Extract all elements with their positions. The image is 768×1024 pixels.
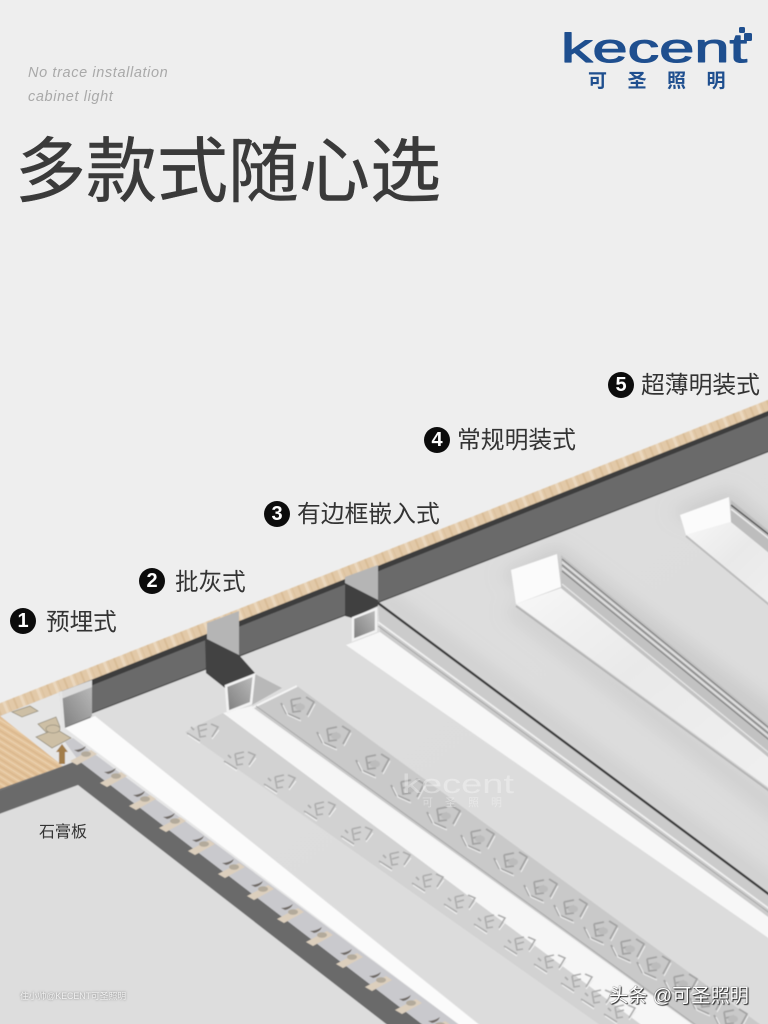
label 1: 预埋式 (46, 610, 117, 636)
logo chinese name: 可圣照明 (588, 66, 746, 93)
white diffuser (65, 716, 503, 1024)
lower ceiling board (0, 785, 412, 1024)
aluminium side (378, 604, 768, 933)
source watermark right: 头条 @可圣照明 (609, 986, 749, 1007)
label 2: 批灰式 (175, 570, 246, 596)
label 3: 有边框嵌入式 (297, 501, 440, 528)
logo wordmark: kecent (561, 25, 748, 71)
installation 2: plaster-in profile (185, 611, 768, 1024)
logo (561, 25, 752, 93)
right flange (252, 686, 768, 1024)
profile channel (59, 680, 92, 729)
label 4: 常规明装式 (457, 427, 576, 454)
gypsum board edge (0, 760, 448, 1024)
label 5: 超薄明装式 (641, 372, 760, 399)
soft shadows beside profiles (378, 488, 768, 911)
installation 1: embedded profile (0, 680, 504, 1024)
loose clips on plate (12, 706, 71, 748)
label 2: 2 (146, 570, 158, 592)
side stripes (731, 500, 768, 570)
source watermark left: 住小帅@KECENT可圣照明 (20, 991, 126, 1001)
label 1 (10, 608, 117, 636)
centre watermark: kecent (402, 769, 515, 799)
english subtitle: cabinet light (28, 89, 113, 105)
gypsum board label: 石膏板 (39, 824, 87, 841)
drawing group (0, 392, 768, 1024)
recessed plate (0, 692, 504, 1024)
channel box (353, 609, 376, 640)
right flange clips (281, 697, 748, 1024)
profile white centre (223, 706, 718, 1024)
wall notch (205, 611, 255, 688)
LED chips (70, 746, 451, 1024)
label 2 (139, 568, 246, 596)
left flange (185, 713, 667, 1024)
installation 3: framed embedded profile (345, 565, 768, 953)
wood block (0, 700, 63, 796)
centre watermark (402, 769, 515, 810)
side stripes (561, 555, 768, 775)
end cap (680, 497, 731, 535)
installation 5: ultra thin surface profile (680, 497, 768, 623)
arrow: installation direction (56, 744, 68, 764)
channel box (226, 674, 282, 712)
wall section (0, 402, 768, 798)
wall notch (345, 565, 378, 618)
label 4: 4 (431, 429, 443, 451)
white flange (346, 632, 768, 953)
installation 4: surface mounted profile (511, 554, 768, 806)
dark reveal line (378, 603, 768, 910)
diffuser (686, 522, 768, 623)
label 3: 3 (271, 503, 283, 525)
label 5: 5 (615, 374, 627, 396)
LED strip base (65, 738, 485, 1024)
centre watermark: 可圣照明 (422, 794, 514, 810)
ceiling plane (0, 412, 768, 1024)
logo dots (739, 27, 752, 41)
wood top strip (0, 392, 768, 724)
end cap (511, 554, 561, 604)
english subtitle (28, 65, 168, 105)
title: 多款式随心选 (15, 133, 441, 212)
left flange clips (187, 724, 636, 1024)
label 1: 1 (17, 610, 29, 632)
english subtitle: No trace installation (28, 65, 168, 81)
diffuser (516, 588, 768, 803)
